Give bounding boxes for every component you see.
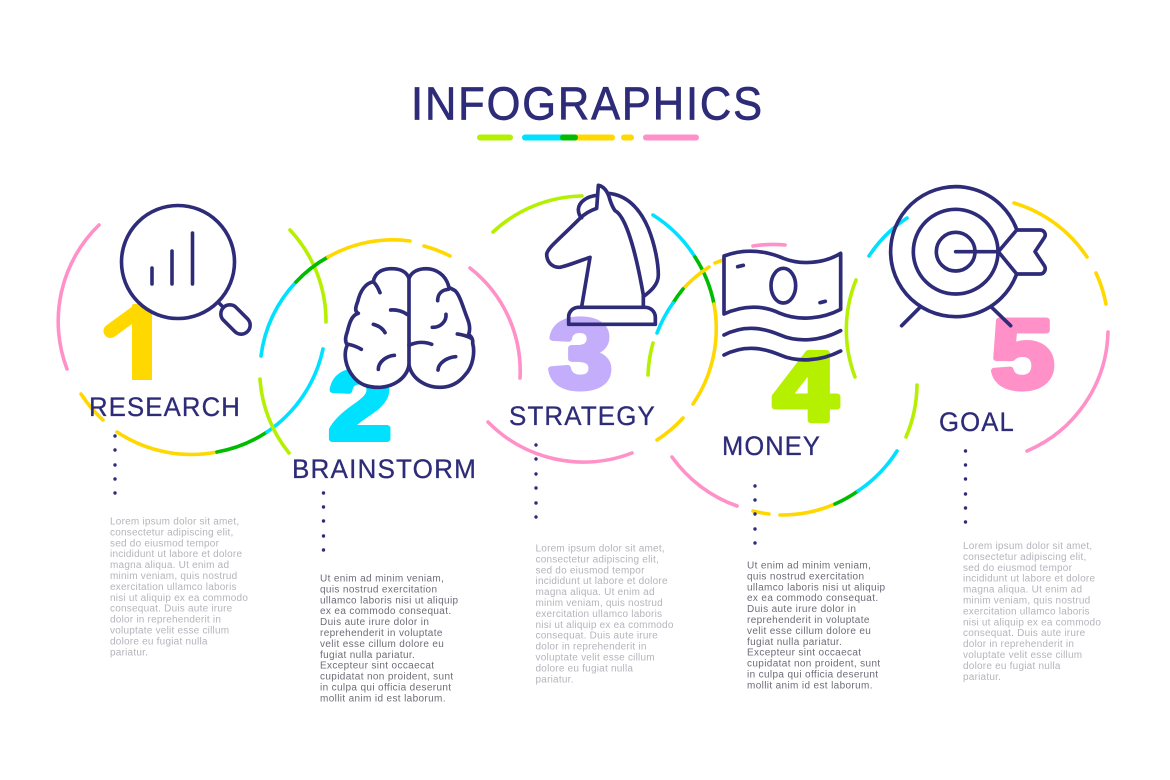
text block 2: mollit anim id est laborum. [320, 693, 446, 704]
text block 2: in culpa qui officia deserunt [320, 682, 451, 694]
text block 4: mollit anim id est laborum. [747, 680, 873, 691]
text block 1: voluptate velit esse cillum [110, 626, 229, 636]
text block 4: in culpa qui officia deserunt [747, 670, 878, 680]
label: research: RESEARCH [89, 392, 241, 422]
text block 5: sed do eiusmod tempor [963, 563, 1073, 574]
number 1: 1 [114, 289, 168, 398]
text block 2: Excepteur sint occaecat [320, 661, 434, 672]
text block 2: quis nostrud exercitation [320, 584, 437, 595]
text block 1: consectetur adipiscing elit, [110, 527, 233, 538]
dotted connector 4 [753, 484, 757, 545]
text block 4: fugiat nulla pariatur. [747, 637, 842, 648]
text block 4: ullamco laboris nisi ut aliquip [747, 582, 886, 593]
ring 2 [260, 240, 520, 453]
text block 3: minim veniam, quis nostrud [536, 598, 663, 609]
text block 3: dolor in reprehenderit in [536, 642, 647, 653]
text block 1: sed do eiusmod tempor [110, 538, 220, 549]
text block 3: incididunt ut labore et dolore [536, 576, 668, 587]
text block 5: nisi ut aliquip ex ea commodo [963, 617, 1101, 628]
text block 2: Duis aute irure dolor in [320, 617, 429, 628]
text block 4: ex ea commodo consequat. [747, 593, 878, 604]
number 5: 5 [991, 300, 1054, 408]
text block 4: velit esse cillum dolore eu [747, 626, 871, 637]
text block 5: magna aliqua. Ut enim ad [963, 585, 1082, 596]
text block 1: dolor in reprehenderit in [110, 615, 221, 626]
text block 4: Excepteur sint occaecat [747, 648, 861, 659]
ring 5 [846, 203, 1108, 451]
text block 2: reprehenderit in voluptate [320, 628, 443, 639]
text block 4: cupidatat non proident, sunt [747, 659, 881, 670]
dotted connector 2 [322, 491, 325, 552]
text block 2: ex ea commodo consequat. [320, 606, 452, 617]
title colour bar [477, 134, 699, 140]
text block 1: incididunt ut labore et dolore [110, 549, 242, 560]
text block 3: magna aliqua. Ut enim ad [536, 587, 655, 598]
text block 1: exercitation ullamco laboris [110, 582, 237, 593]
ring 1 [58, 225, 326, 454]
text block 3: exercitation ullamco laboris [536, 609, 662, 620]
text block 1: Lorem ipsum dolor sit amet, [110, 516, 239, 528]
text block 4: Ut enim ad minim veniam, [747, 560, 871, 572]
text block 5: minim veniam, quis nostrud [963, 596, 1090, 606]
dotted connector 1 [113, 434, 117, 495]
number 4: 4 [774, 332, 838, 441]
label: strategy: STRATEGY [509, 401, 656, 431]
icon: target with dart [891, 187, 1045, 326]
text block 2: fugiat nulla pariatur. [320, 650, 415, 661]
text block 5: dolor in reprehenderit in [963, 639, 1074, 650]
ring 3 [488, 196, 716, 462]
text block 2: cupidatat non proident, sunt [320, 672, 454, 683]
text block 2: Ut enim ad minim veniam, [320, 574, 444, 584]
text block 1: magna aliqua. Ut enim ad [110, 560, 229, 571]
text block 5: exercitation ullamco laboris [963, 606, 1090, 617]
ring 4 [648, 244, 917, 515]
label: money: MONEY [722, 431, 821, 461]
text block 4: Duis aute irure dolor in [747, 604, 856, 615]
text block 5: pariatur. [963, 672, 1001, 683]
dotted connector 5 [964, 449, 967, 524]
text block 4: quis nostrud exercitation [747, 571, 864, 582]
number 1 [104, 304, 152, 380]
text block 5: voluptate velit esse cillum [963, 650, 1082, 661]
text block 3: Lorem ipsum dolor sit amet, [536, 544, 665, 554]
icon: brain [345, 269, 474, 387]
text block 5: incididunt ut labore et dolore [963, 574, 1095, 585]
icon: banknote and waves [724, 251, 841, 360]
text block 1: dolore eu fugiat nulla [110, 636, 208, 647]
text block 3: consectetur adipiscing elit, [536, 554, 659, 565]
text block 1: pariatur. [110, 647, 148, 658]
text block 1: nisi ut aliquip ex ea commodo [110, 593, 248, 604]
text block 5: consectetur adipiscing elit, [963, 552, 1086, 563]
text block 1: consequat. Duis aute irure [110, 604, 233, 615]
title: INFOGRAPHICS [411, 78, 764, 130]
text block 4: reprehenderit in voluptate [747, 615, 870, 626]
text block 1: minim veniam, quis nostrud [110, 571, 237, 582]
icon: magnifying glass with bars [122, 206, 254, 338]
text block 2: ullamco laboris nisi ut aliquip [320, 595, 459, 606]
text block 3: pariatur. [536, 674, 574, 685]
icon: chess knight [547, 185, 658, 324]
dotted connector 3 [534, 443, 538, 519]
text block 5: consequat. Duis aute irure [963, 628, 1086, 639]
text block 2: velit esse cillum dolore eu [320, 639, 444, 650]
text block 5: Lorem ipsum dolor sit amet, [963, 541, 1092, 552]
text block 3: voluptate velit esse cillum [536, 652, 655, 664]
text block 3: nisi ut aliquip ex ea commodo [536, 620, 674, 631]
text block 3: dolore eu fugiat nulla [536, 663, 633, 674]
text block 5: dolore eu fugiat nulla [963, 661, 1061, 672]
label: goal: GOAL [939, 407, 1015, 437]
number 2: 2 [328, 351, 392, 460]
text block 3: sed do eiusmod tempor [536, 565, 645, 576]
number 3: 3 [549, 300, 612, 408]
label: brainstorm: BRAINSTORM [292, 454, 477, 484]
text block 3: consequat. Duis aute irure [536, 631, 658, 642]
